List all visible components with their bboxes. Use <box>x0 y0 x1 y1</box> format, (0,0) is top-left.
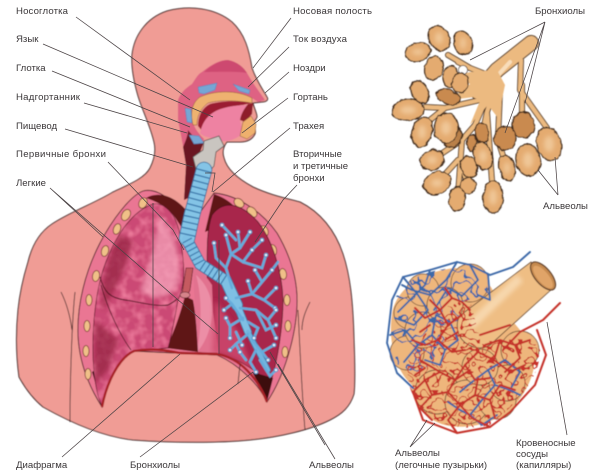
left labels: Надгортанник <box>16 92 81 103</box>
capillary labels: (капилляры) <box>516 460 571 471</box>
larynx <box>193 136 224 173</box>
left labels: Легкие <box>16 178 46 189</box>
right labels: Трахея <box>293 121 324 132</box>
rib cross-sections <box>83 196 291 380</box>
panel: main torso anatomy <box>61 60 310 430</box>
bottom labels: Диафрагма <box>16 460 68 471</box>
cluster labels: Бронхиолы <box>535 6 585 17</box>
right labels: Ноздри <box>293 63 326 74</box>
capillary labels: Альвеолы <box>395 448 440 459</box>
panel: bronchioles and alveoli cluster <box>391 22 565 213</box>
dark pleural arcs <box>146 194 234 240</box>
cluster labels <box>535 6 588 212</box>
capillary labels: сосуды <box>516 449 548 460</box>
right labels: бронхи <box>293 173 325 184</box>
cluster labels: Альвеолы <box>543 201 588 212</box>
bottom labels <box>16 460 354 471</box>
arm creases <box>61 292 310 430</box>
right labels: Носовая полость <box>293 6 372 17</box>
right lung <box>193 205 283 385</box>
bottom labels: Альвеолы <box>309 460 354 471</box>
right labels <box>293 6 372 184</box>
chest pleura band <box>78 190 297 407</box>
capillary labels: Кровеносные <box>516 438 576 449</box>
right labels: Вторичные <box>293 149 342 160</box>
bottom labels: Бронхиолы <box>130 460 180 471</box>
right labels: Ток воздуха <box>293 34 348 45</box>
body silhouette <box>17 8 355 442</box>
left labels: Носоглотка <box>16 6 69 17</box>
lower mediastinum <box>166 296 198 352</box>
air tube <box>457 258 560 348</box>
left lung <box>92 202 185 404</box>
right labels: Гортань <box>293 92 328 103</box>
red mesh texture <box>407 299 541 428</box>
left labels: Язык <box>16 34 39 45</box>
red vessels <box>412 288 560 433</box>
alveolar spheres <box>390 264 539 427</box>
left labels: Первичные бронхи <box>16 149 106 160</box>
nasal cavity and pharynx <box>178 60 265 200</box>
vessel mesh texture <box>390 268 490 372</box>
left labels <box>16 6 106 189</box>
right labels: и третичные <box>293 161 348 172</box>
diaphragm <box>102 350 267 407</box>
alveolar highlights <box>400 32 554 205</box>
capillary labels: (легочные пузырьки) <box>395 460 487 471</box>
panel: alveolus with capillaries <box>385 252 560 435</box>
alveolar lobes <box>391 22 565 213</box>
left labels: Глотка <box>16 63 46 74</box>
left labels: Пищевод <box>16 121 57 132</box>
bronchiole branches <box>425 43 547 195</box>
capillary labels <box>395 438 576 471</box>
esophagus <box>182 268 193 296</box>
blue vessels <box>387 252 530 425</box>
bronchial tree <box>187 170 278 376</box>
